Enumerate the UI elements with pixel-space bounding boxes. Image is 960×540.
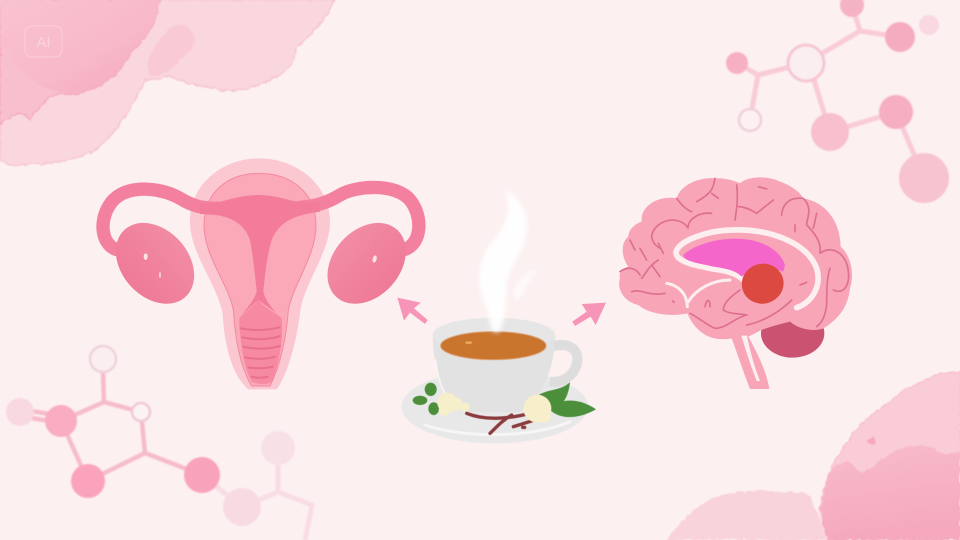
fallopian tube: right	[300, 187, 419, 249]
tea	[441, 332, 546, 360]
molecule: bottom left	[6, 346, 312, 540]
watermark: AI badge	[25, 26, 62, 57]
brain outline	[619, 177, 852, 389]
steam	[479, 190, 537, 333]
watercolor: bottom centre right	[667, 491, 827, 540]
vaginal ridges	[241, 327, 280, 378]
illustration: cup of tea	[402, 190, 596, 443]
cup rim	[432, 318, 555, 352]
cortex folds	[620, 178, 849, 328]
watercolor: bottom right	[820, 373, 960, 540]
molecule: top right	[726, 0, 949, 203]
cerebellum	[761, 309, 824, 358]
cup highlight	[436, 360, 449, 401]
watercolor: top left	[0, 0, 335, 165]
leaves: left	[413, 383, 439, 415]
corpus callosum	[676, 230, 818, 308]
arrow: to uterus	[397, 298, 428, 324]
flower: right	[523, 395, 551, 423]
limbic region	[683, 239, 785, 277]
inner wall	[204, 173, 316, 386]
saucer	[402, 370, 588, 443]
flower: left	[437, 393, 470, 416]
vagina	[239, 300, 282, 384]
cinnamon sticks	[467, 412, 537, 433]
cup body	[433, 335, 555, 412]
outer wall	[190, 158, 330, 389]
brain stem highlight	[741, 336, 760, 381]
illustration: uterus and ovaries	[100, 158, 422, 389]
leaves: right	[536, 382, 596, 417]
ovary: right	[312, 207, 422, 319]
fallopian tube: left	[103, 189, 220, 249]
thalamus	[737, 259, 788, 308]
ovary: left	[100, 207, 210, 319]
illustration: brain	[619, 177, 852, 389]
cup handle	[550, 345, 577, 382]
uterine cavity	[200, 195, 320, 315]
white matter tracts	[667, 280, 730, 307]
watermark: AI badge: AI	[36, 34, 51, 51]
arrow: to brain	[572, 303, 606, 326]
